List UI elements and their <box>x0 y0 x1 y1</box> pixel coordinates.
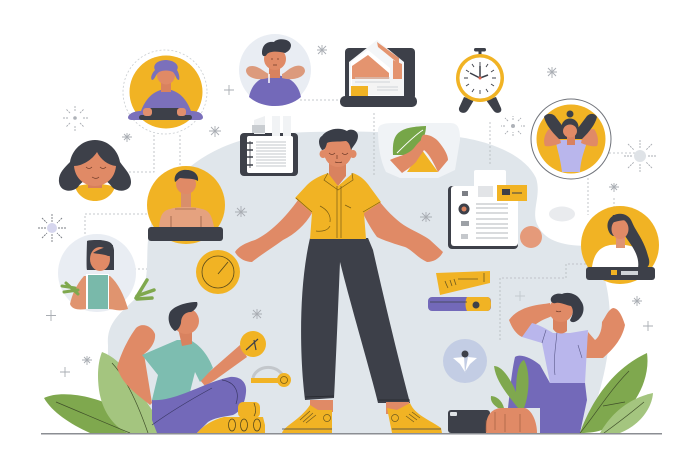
purple scroll banner <box>428 297 491 311</box>
raised knee arm <box>117 325 155 405</box>
key with arc <box>251 367 291 387</box>
legs <box>301 238 410 403</box>
shirt <box>522 323 588 383</box>
portrait: man behind desk <box>147 166 225 244</box>
right arm and hand <box>363 202 443 262</box>
coin stacks <box>197 402 265 433</box>
forearm with coin <box>200 345 247 386</box>
yellow ticket banner <box>436 271 490 295</box>
shirt <box>142 340 213 401</box>
dashed connectors <box>85 100 640 342</box>
round insect badge <box>443 339 487 383</box>
potted plant and case <box>448 360 537 433</box>
neck <box>329 160 346 186</box>
ankles <box>310 400 409 414</box>
portrait: man with hood <box>239 34 311 106</box>
laptop with house diagram <box>340 40 417 107</box>
head <box>549 298 573 322</box>
ground line <box>41 433 662 434</box>
faint doodle <box>549 206 575 222</box>
portrait: woman with long hair and nameplate <box>581 206 659 284</box>
hair <box>319 129 358 150</box>
sitting man <box>117 302 247 433</box>
background blob <box>108 132 610 433</box>
left arm and hand <box>235 200 312 262</box>
flexed arm <box>585 308 625 358</box>
portrait: girl with plants <box>58 234 154 312</box>
notebook <box>240 116 298 176</box>
portrait: woman with dark hair <box>59 140 131 201</box>
bottom-right large leaves <box>580 353 653 433</box>
hair <box>169 302 197 331</box>
portrait: woman with tablet <box>123 50 207 134</box>
head <box>173 308 199 334</box>
sparkles and plus marks <box>38 45 656 377</box>
legs <box>508 356 587 433</box>
coin in hand <box>240 331 266 357</box>
face <box>329 153 348 163</box>
curly hair <box>551 293 584 322</box>
raised arm behind head <box>509 303 552 337</box>
neck <box>178 328 192 346</box>
ears <box>320 150 357 158</box>
sparkle centres <box>47 116 646 233</box>
speed gauge <box>196 250 240 294</box>
alarm clock <box>456 48 504 113</box>
bottom-left large leaves <box>44 352 165 433</box>
hands holding leaf <box>378 123 460 178</box>
kneeling woman <box>508 293 625 433</box>
document with tag <box>448 170 527 249</box>
head <box>324 137 352 167</box>
crossed legs <box>152 377 246 433</box>
left shoe <box>282 405 332 433</box>
central man <box>235 129 443 433</box>
portrait: woman with raised arms <box>531 99 611 179</box>
right shoe <box>387 403 442 433</box>
neck <box>553 318 567 333</box>
shirt <box>295 173 381 239</box>
orange coin <box>520 226 542 248</box>
